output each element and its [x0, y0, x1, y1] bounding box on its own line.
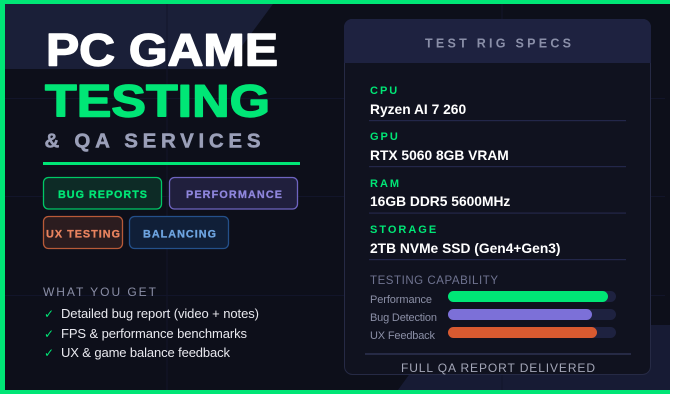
tag: bug reports [44, 178, 162, 209]
bar: bug detection: Bug Detection [370, 312, 437, 324]
spec: cpu: Ryzen AI 7 260 [370, 102, 466, 117]
item 1: ✓ [44, 307, 54, 321]
tag: performance [170, 178, 298, 209]
bar: performance [370, 291, 616, 306]
title line: PC GAME: PC GAME [46, 24, 278, 76]
item 3: UX & game balance feedback [61, 345, 230, 360]
title line: TESTING: TESTING [45, 76, 270, 126]
spec: storage: STORAGE [370, 224, 438, 236]
spec: gpu [369, 131, 626, 167]
tag: performance: PERFORMANCE [186, 189, 282, 201]
what you get list [43, 285, 259, 360]
spec: ram [369, 178, 626, 214]
chart heading: TESTING CAPABILITY [370, 275, 498, 287]
item 2: ✓ [44, 327, 54, 341]
panel footer: FULL QA REPORT DELIVERED [401, 361, 595, 375]
service tags [44, 178, 298, 248]
panel: test rig specs [344, 19, 651, 375]
spec: gpu: RTX 5060 8GB VRAM [370, 148, 509, 163]
spec: cpu [369, 85, 626, 121]
panel header: TEST RIG SPECS [425, 36, 571, 50]
tag: balancing: BALANCING [143, 228, 216, 240]
spec: cpu: CPU [370, 85, 399, 97]
item 3: ✓ [44, 346, 54, 360]
bar: performance: Performance [370, 294, 432, 306]
spec: ram: RAM [370, 178, 401, 190]
title [44, 24, 278, 152]
spec: ram: 16GB DDR5 5600MHz [370, 194, 510, 209]
tag: ux testing: UX TESTING [46, 228, 120, 240]
spec: storage [369, 224, 626, 260]
subtitle: & QA SERVICES [44, 130, 260, 152]
tag: bug reports: BUG REPORTS [58, 189, 147, 201]
bar: ux feedback [370, 327, 616, 342]
tag: ux testing [44, 216, 122, 248]
item 2: FPS & performance benchmarks [61, 326, 248, 341]
tag: balancing [130, 216, 228, 248]
spec: gpu: GPU [370, 131, 400, 143]
panel header [344, 19, 651, 63]
bar: bug detection [370, 309, 616, 324]
testing capability chart [370, 275, 616, 342]
item 1: Detailed bug report (video + notes) [61, 306, 259, 321]
bar: ux feedback: UX Feedback [370, 330, 436, 342]
spec: storage: 2TB NVMe SSD (Gen4+Gen3) [370, 241, 561, 256]
heading: WHAT YOU GET [43, 285, 157, 299]
